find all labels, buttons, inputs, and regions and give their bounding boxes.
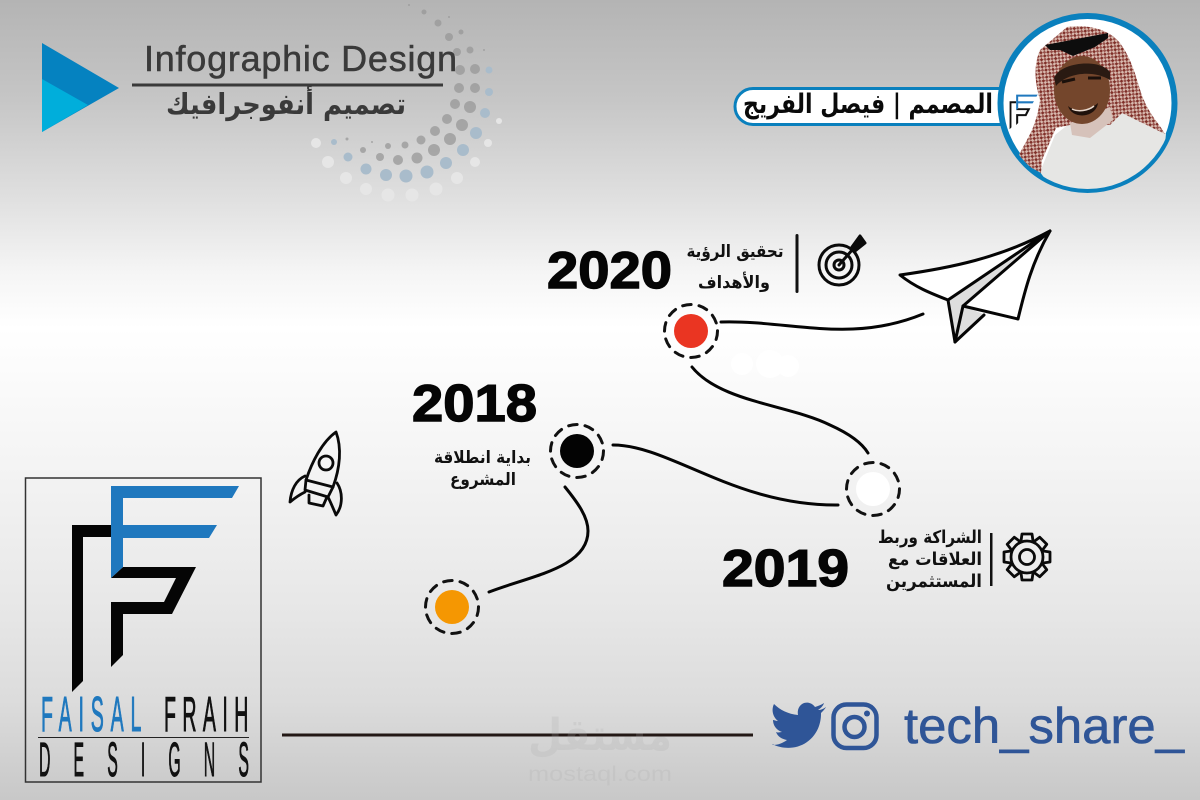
text: 2020 goal bbox=[686, 242, 784, 293]
text: 2020 goal: تحقيق الرؤية bbox=[686, 242, 784, 262]
designer name pill bbox=[735, 88, 1025, 124]
icon: rocket bbox=[290, 432, 341, 515]
logo name: FAISAL bbox=[41, 686, 148, 742]
watermark: مستقل bbox=[528, 710, 672, 761]
header underline bbox=[132, 84, 443, 86]
icon: paper plane bbox=[900, 231, 1050, 342]
text: 2018 project start bbox=[434, 448, 531, 490]
node 2019 white bbox=[846, 462, 900, 516]
timeline connector 2018 start bbox=[489, 487, 588, 592]
footer rule bbox=[282, 734, 753, 736]
divider 2019 bbox=[990, 533, 992, 586]
text: 2018 project start: بداية انطلاقة bbox=[434, 448, 531, 468]
logo name bbox=[41, 686, 255, 742]
text: 2019 partnership bbox=[878, 528, 982, 592]
node 2020 red bbox=[664, 304, 718, 358]
designer name: المصمم | فيصل الفريج bbox=[743, 89, 993, 120]
logo mark bbox=[72, 486, 239, 692]
watermark bbox=[528, 710, 672, 786]
year 2018: 2018 bbox=[412, 375, 537, 433]
panel: FF logo box bbox=[26, 478, 272, 787]
logo rule bbox=[38, 737, 249, 738]
timeline connector to plane bbox=[721, 314, 923, 329]
logo name: FRAIH bbox=[164, 686, 255, 742]
small FF mark bbox=[1010, 95, 1038, 129]
year 2019: 2019 bbox=[722, 540, 849, 598]
node 2018 black bbox=[550, 424, 604, 478]
icon: target bbox=[819, 236, 865, 285]
logo designs: DESIGNS bbox=[39, 733, 272, 787]
designer portrait bbox=[1000, 16, 1174, 200]
node start orange bbox=[426, 580, 478, 634]
white smudge bbox=[731, 350, 799, 378]
text: 2018 project start: المشروع bbox=[450, 470, 516, 490]
icon: gear bbox=[1004, 534, 1050, 580]
text: 2019 partnership: المستثمرين bbox=[886, 572, 982, 592]
timeline connector 2019 to 2020 bbox=[692, 367, 868, 453]
halftone dot arc bbox=[311, 4, 502, 202]
timeline connector 2018 to 2019 bbox=[613, 445, 838, 505]
watermark: mostaql.com bbox=[528, 763, 672, 786]
year 2020: 2020 bbox=[547, 242, 672, 300]
icon: twitter bird bbox=[772, 703, 826, 748]
header title english: Infographic Design bbox=[144, 38, 457, 79]
text: 2020 goal: والأهداف bbox=[698, 272, 770, 293]
social handle: tech_share_ bbox=[904, 698, 1185, 754]
header title arabic: تصميم أنفوجرافيك bbox=[166, 85, 406, 121]
text: 2019 partnership: العلاقات مع bbox=[888, 550, 982, 570]
play triangle logo bbox=[42, 43, 119, 132]
divider 2020 bbox=[796, 234, 798, 293]
icon: instagram bbox=[834, 704, 876, 748]
text: 2019 partnership: الشراكة وربط bbox=[878, 528, 982, 548]
